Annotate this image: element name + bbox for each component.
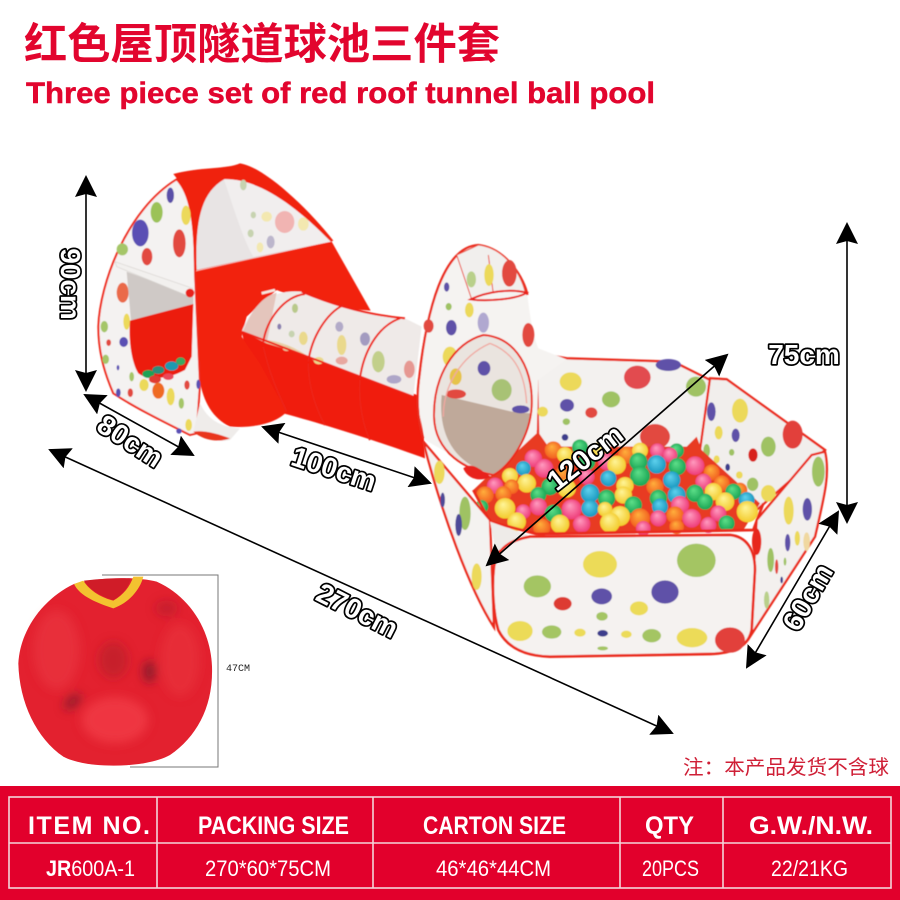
- pool left panel: [423, 442, 494, 627]
- label: 100cm: 100cm: [288, 441, 380, 497]
- label: 47CM: 47CM: [226, 664, 250, 675]
- red corner post: [752, 528, 761, 555]
- label: 60cm: 60cm: [776, 558, 839, 636]
- front panel dots: [507, 544, 745, 653]
- header row: PACKING SIZE: [198, 812, 349, 840]
- pool back panel: [537, 353, 710, 453]
- data row: JR600A-1: [46, 856, 135, 881]
- second tent arch: [418, 245, 567, 477]
- tunnel ribs: [242, 292, 413, 440]
- product: ball pool and second tent: [418, 245, 827, 657]
- tent red body: [195, 242, 371, 427]
- folded carry bag: [18, 577, 212, 766]
- pool back dots: [537, 359, 803, 502]
- arrow: 60cm: [747, 512, 838, 667]
- label: 120cm: 120cm: [541, 418, 629, 497]
- pool right panel: [750, 452, 827, 637]
- spec table: [0, 786, 900, 900]
- pool front panel: [493, 535, 755, 657]
- bag yellow collar: [74, 577, 143, 608]
- arrow: 100cm: [263, 427, 430, 483]
- arch dots: [424, 282, 534, 367]
- right panel dots: [764, 457, 825, 609]
- bag shading: [33, 600, 200, 743]
- label: 270cm: 270cm: [311, 577, 403, 644]
- balls: [475, 439, 758, 536]
- data row: 270*60*75CM: [205, 856, 331, 881]
- label: 75cm: 75cm: [768, 339, 840, 370]
- tunnel upper mesh: [242, 291, 422, 397]
- tent roof window: [196, 179, 331, 270]
- tent left panel dots: [101, 188, 200, 434]
- data row: 20PCS: [642, 856, 699, 881]
- header row: G.W./N.W.: [749, 812, 873, 840]
- pool rim: [473, 490, 763, 534]
- data row: 46*46*44CM: [436, 856, 551, 881]
- arrow: 90cm: [85, 177, 87, 390]
- bag body: [18, 578, 212, 766]
- pool floor sliver and red corner: [490, 522, 528, 553]
- arch skylight: [457, 245, 527, 300]
- header row: ITEM NO.: [28, 812, 150, 840]
- data row: [46, 856, 848, 881]
- note: 注：本产品发货不含球: [683, 756, 889, 779]
- tent left white panel: [98, 179, 200, 435]
- ball pit floor: [473, 430, 760, 535]
- header row: QTY: [645, 812, 694, 840]
- table band: [0, 786, 900, 900]
- left panel dots: [434, 461, 482, 590]
- data row: 22/21KG: [771, 856, 848, 881]
- arrow: 75cm: [846, 224, 848, 522]
- arch mesh doorway: [434, 335, 532, 479]
- tunnel lower red: [242, 332, 425, 458]
- bag opening: [84, 578, 131, 600]
- arrow: 270cm: [50, 450, 672, 733]
- title: English: Three piece set of red roof tunnel ball pool: [26, 77, 655, 110]
- tent side doorway: [115, 262, 194, 399]
- header row: [28, 812, 873, 840]
- roof window dots: [240, 180, 309, 252]
- header row: CARTON SIZE: [423, 812, 566, 840]
- label: 80cm: 80cm: [92, 409, 169, 474]
- product: tent and tunnel: [98, 163, 425, 458]
- bag height bracket: [102, 575, 218, 767]
- tunnel dots: [277, 304, 415, 384]
- arrow: 120cm: [487, 355, 727, 565]
- tent front fold: [193, 403, 240, 441]
- pool back-right panel: [700, 378, 825, 510]
- title: Chinese: 红色屋顶隧道球池三件套: [24, 21, 500, 69]
- table grid: [9, 797, 891, 888]
- red corner patch: [493, 549, 516, 572]
- tent roof red band: [173, 163, 333, 271]
- arrow: 80cm: [85, 395, 193, 455]
- tunnel inner: [243, 293, 277, 343]
- label: 90cm: 90cm: [55, 248, 86, 320]
